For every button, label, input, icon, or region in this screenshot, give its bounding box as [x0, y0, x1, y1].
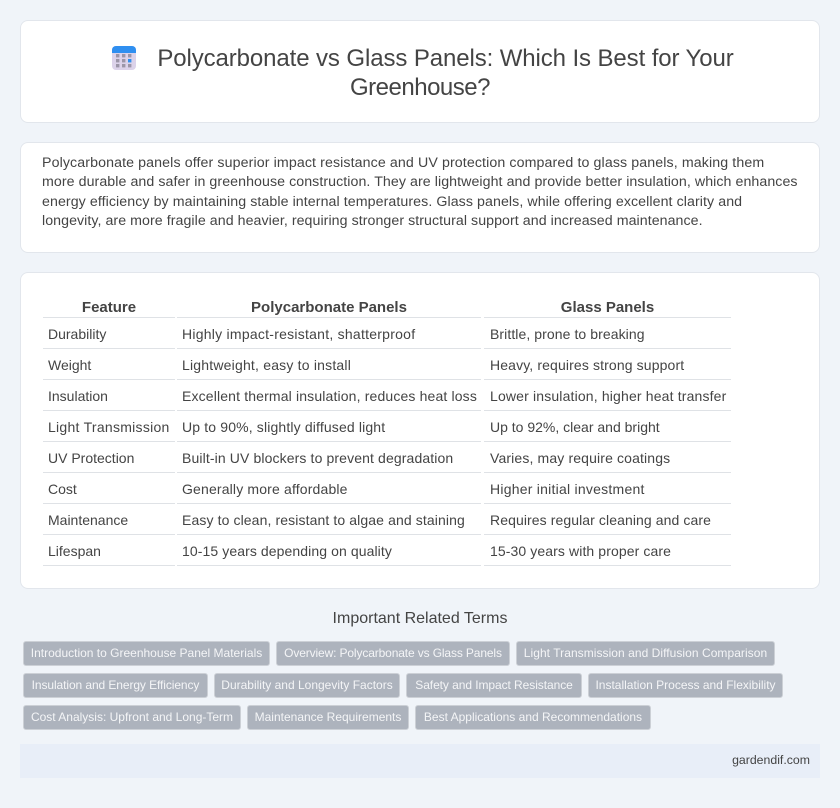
- row: Cost: Cost: [48, 481, 77, 497]
- title line 1: Polycarbonate vs Glass Panels: Which Is Best for Your: [157, 45, 734, 72]
- tag: Insulation and Energy Efficiency: [32, 678, 199, 692]
- row: Cost: Generally more affordable: [182, 481, 348, 497]
- tag: [23, 641, 270, 666]
- tag: Safety and Impact Resistance: [415, 678, 573, 692]
- tag: [406, 673, 582, 698]
- row: Durability: [48, 326, 645, 342]
- row: UV Protection: [48, 450, 670, 466]
- icon: calendar: [112, 46, 136, 70]
- row: Cost: [48, 481, 645, 497]
- row: Lifespan: 10-15 years depending on quality: [182, 543, 392, 559]
- footer site name: gardendif.com: [732, 753, 810, 767]
- title line 2: Greenhouse?: [350, 74, 490, 101]
- row: Insulation: Excellent thermal insulation, reduces heat loss: [182, 388, 477, 404]
- tag: Maintenance Requirements: [255, 710, 401, 724]
- heading: Important Related Terms: Important Related Terms: [333, 610, 507, 627]
- tag: Overview: Polycarbonate vs Glass Panels: [284, 646, 502, 660]
- intro paragraph: Polycarbonate panels offer superior impact resistance and UV protection compared to glass panels, making them: [42, 155, 764, 171]
- row: Light Transmission: Up to 90%, slightly diffused light: [182, 419, 385, 435]
- panel: comparison table: [20, 272, 820, 589]
- row: Maintenance: Requires regular cleaning and care: [490, 512, 711, 528]
- row: Maintenance: Maintenance: [48, 512, 128, 528]
- panel: intro summary: [20, 142, 820, 253]
- intro paragraph: [42, 155, 798, 229]
- row: Weight: [48, 357, 684, 373]
- row: Lifespan: 15-30 years with proper care: [490, 543, 671, 559]
- row: UV Protection: Varies, may require coatings: [490, 450, 670, 466]
- tag: Cost Analysis: Upfront and Long-Term: [31, 710, 233, 724]
- tag: [23, 673, 208, 698]
- footer bar: [20, 744, 820, 778]
- row: Durability: Durability: [48, 326, 106, 342]
- table header: Feature: Feature: [82, 299, 136, 316]
- intro paragraph: energy efficiency by maintaining stable internal temperatures. Glass panels, while offering excellent clarity and: [42, 194, 742, 210]
- table header: Polycarbonate Panels: Polycarbonate Panels: [251, 299, 407, 316]
- row: Insulation: Lower insulation, higher heat transfer: [490, 388, 726, 404]
- tag: [247, 705, 409, 730]
- row: Insulation: Insulation: [48, 388, 108, 404]
- row: Light Transmission: Light Transmission: [48, 419, 170, 435]
- row: Insulation: [48, 388, 726, 404]
- row: Lifespan: Lifespan: [48, 543, 101, 559]
- intro paragraph: longevity, are more fragile and heavier, requiring stronger structural support and increased maintenance.: [42, 213, 703, 229]
- row: Weight: Lightweight, easy to install: [182, 357, 351, 373]
- table header: Glass Panels: Glass Panels: [561, 299, 654, 316]
- tag: Installation Process and Flexibility: [595, 678, 776, 692]
- tag: [415, 705, 651, 730]
- tag: [214, 673, 400, 698]
- row: Durability: Highly impact-resistant, shatterproof: [182, 326, 415, 342]
- tag: Best Applications and Recommendations: [424, 710, 642, 724]
- tag: [588, 673, 783, 698]
- tag: [276, 641, 510, 666]
- tag: Light Transmission and Diffusion Comparison: [524, 646, 767, 660]
- row: Maintenance: [48, 512, 711, 528]
- row: UV Protection: Built-in UV blockers to prevent degradation: [182, 450, 453, 466]
- intro paragraph: more durable and safer in greenhouse construction. They are lightweight and provide better insulation, which enhances: [42, 174, 798, 190]
- row: Weight: Weight: [48, 357, 91, 373]
- tag: Introduction to Greenhouse Panel Materials: [31, 646, 262, 660]
- row: Cost: Higher initial investment: [490, 481, 645, 497]
- row: Light Transmission: Up to 92%, clear and bright: [490, 419, 660, 435]
- row: Weight: Heavy, requires strong support: [490, 357, 684, 373]
- row: UV Protection: UV Protection: [48, 450, 134, 466]
- tag: Durability and Longevity Factors: [221, 678, 393, 692]
- row: Maintenance: Easy to clean, resistant to algae and staining: [182, 512, 465, 528]
- tag: [516, 641, 775, 666]
- tag list: [23, 641, 783, 730]
- row: Durability: Brittle, prone to breaking: [490, 326, 645, 342]
- row: Light Transmission: [48, 419, 660, 435]
- tag: [23, 705, 241, 730]
- panel: header: [20, 20, 820, 123]
- row: Lifespan: [48, 543, 671, 559]
